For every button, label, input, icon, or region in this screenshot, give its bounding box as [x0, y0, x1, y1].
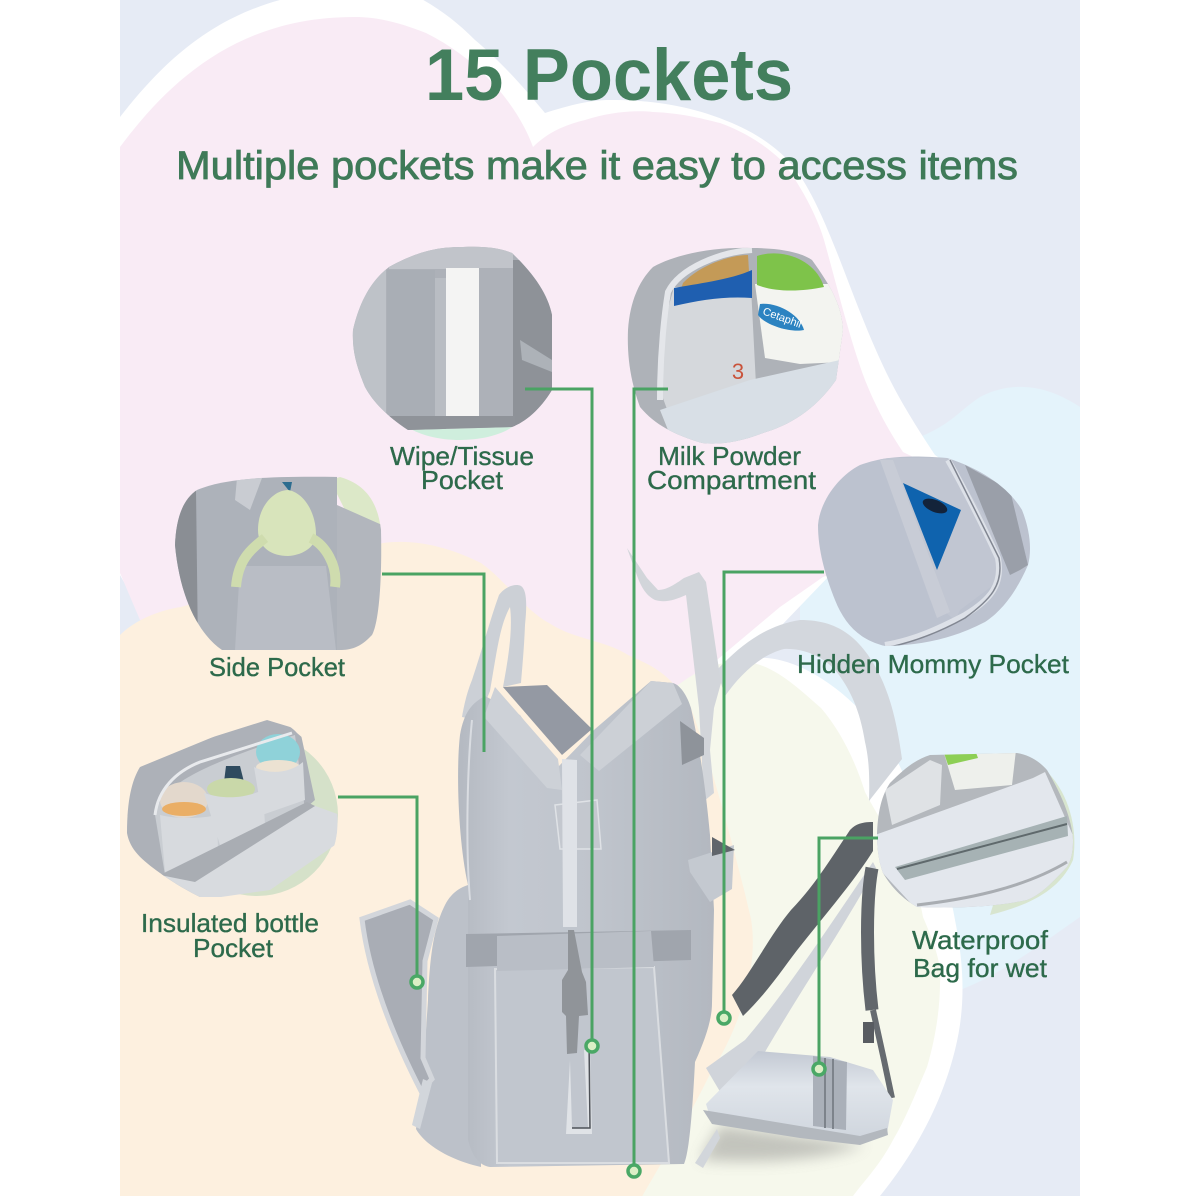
label: waterproof bag: Bag for wet [913, 953, 1048, 983]
seam strip [880, 460, 950, 618]
pocket photo: milk powder [625, 245, 845, 450]
padded mesh shoulder strap [717, 620, 902, 801]
side elastic top [712, 837, 735, 856]
number on tin: 3 [732, 359, 744, 384]
cetaphil bottle [755, 284, 843, 364]
bottle: blue [256, 734, 300, 763]
zipper curve [885, 460, 999, 645]
label: wipe/tissue pocket: Pocket [421, 465, 504, 495]
pouch zipper tab [695, 1129, 720, 1168]
label: insulated bottle pocket: Insulated bottle [141, 908, 319, 938]
callout lines [338, 389, 878, 1170]
bag side pocket bulge [416, 885, 481, 1167]
label: hidden mommy pocket: Hidden Mommy Pocket [797, 649, 1070, 679]
label: milk powder compartment: Compartment [647, 465, 817, 495]
bag body [458, 681, 714, 1167]
flap [875, 772, 1075, 910]
pocket photo: wipe/tissue [350, 245, 555, 440]
label: side pocket: Side Pocket [209, 652, 346, 682]
pocket photo: waterproof bag [875, 750, 1075, 915]
green backing [990, 765, 1074, 915]
bottom pouch flap open [706, 1051, 893, 1140]
bottom pouch rim [703, 1110, 888, 1145]
pocket photo: insulated bottle [125, 720, 340, 900]
bottle pocket front [235, 566, 336, 650]
label: wipe/tissue pocket [390, 441, 534, 495]
backpack main illustration [362, 548, 902, 1168]
label: milk powder compartment: Milk Powder [658, 441, 801, 471]
key strap [562, 759, 577, 927]
green backing [176, 734, 338, 896]
green bottle [258, 490, 316, 556]
pocket photo: side pocket [175, 475, 382, 655]
label: wipe/tissue pocket: Wipe/Tissue [390, 441, 534, 471]
label: insulated bottle pocket: Pocket [193, 933, 274, 963]
flap rim [917, 862, 1067, 905]
right side strap loop [688, 845, 734, 902]
strap buckle [863, 1022, 874, 1043]
vertical strap lower end [873, 1010, 892, 1098]
label: insulated bottle pocket [141, 908, 319, 963]
open flap [660, 360, 838, 444]
leader: waterproof bag [819, 838, 878, 1068]
left carry handle [462, 585, 526, 720]
callout dots [411, 976, 825, 1177]
flap ground shadow [700, 1125, 865, 1162]
subtitle: Multiple pockets make it easy to access items [176, 144, 1018, 188]
bottle: orange [160, 782, 208, 818]
bottom pouch zipper [813, 1056, 847, 1130]
pocket photo: milk powder: Cetaphil [761, 306, 803, 331]
leader: hidden mommy pocket [724, 572, 824, 1018]
leader: milk powder compartment [634, 389, 668, 1170]
leader: wipe/tissue pocket [525, 389, 592, 1046]
label: waterproof bag [912, 925, 1049, 983]
tins inside [885, 760, 942, 825]
background panel with pastel blobs [120, 0, 1080, 1200]
left seam [467, 720, 472, 900]
light webbing strap [706, 862, 876, 1095]
bottle handles [236, 538, 335, 587]
front elastic band [466, 930, 691, 967]
open flap [160, 803, 340, 900]
green backing [330, 477, 381, 540]
pocket photo: hidden mommy pocket [815, 452, 1035, 650]
formula tin [660, 287, 756, 412]
zipper outline [885, 460, 1000, 648]
pouch zipper teeth [825, 1058, 833, 1129]
front slit zipper [566, 1050, 592, 1134]
right dark band [965, 465, 1028, 575]
title: 15 Pockets [425, 35, 793, 116]
interior lining of the opening [503, 685, 592, 755]
leader: side pocket [382, 574, 484, 752]
front pocket flap [497, 931, 654, 971]
open side pocket [362, 902, 436, 1091]
keys and clip [562, 930, 588, 1054]
front pocket [495, 967, 669, 1163]
mint backing [405, 425, 515, 440]
zipper band [895, 816, 1068, 880]
right side tab [680, 721, 704, 765]
zipper edge [155, 733, 292, 815]
phone [903, 483, 961, 570]
zip puller tab [555, 800, 601, 849]
zipper edge [660, 250, 752, 400]
right carry handle [627, 548, 721, 801]
label: waterproof bag: Waterproof [912, 925, 1049, 955]
side pocket tab [412, 1079, 432, 1129]
dark shoulder strap [732, 822, 873, 1016]
right zipper rim [580, 681, 682, 771]
vertical rear strap [868, 868, 872, 1010]
bottle: green [224, 766, 244, 780]
slit dark line [572, 1040, 590, 1128]
label: milk powder compartment [647, 441, 817, 495]
leader: insulated bottle pocket [338, 797, 417, 982]
left zipper rim [484, 687, 562, 790]
